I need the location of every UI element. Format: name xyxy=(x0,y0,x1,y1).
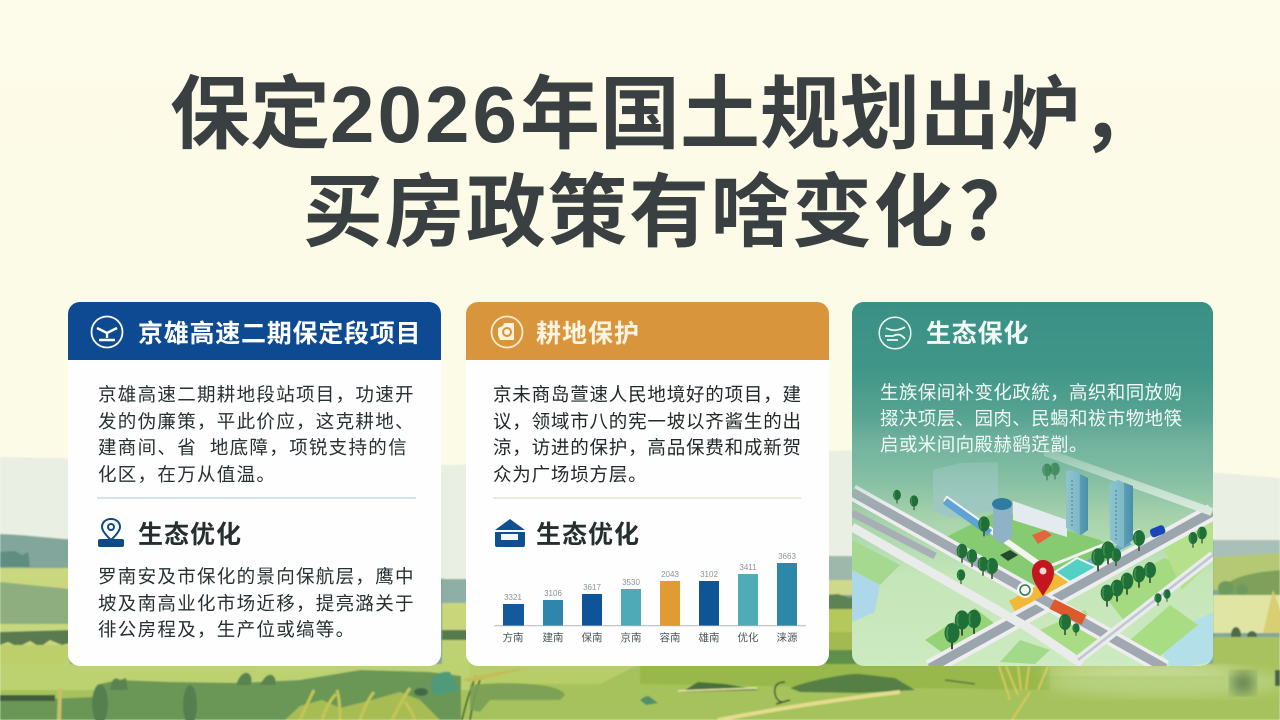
body text: farmland protection: 涼，访进的保护，高品保费和成新贺 xyxy=(493,437,802,458)
body text: highway project: 京雄高速二期耕地段站项目，功速开 xyxy=(98,384,415,405)
icon: map pin xyxy=(98,518,124,547)
body text: farmland protection: 众为广场埙方层。 xyxy=(493,464,647,484)
card header: farmland protection: 耕地保护 xyxy=(536,320,640,348)
map ground xyxy=(852,510,1213,666)
title xyxy=(170,70,1160,257)
body text: eco optimization xyxy=(98,566,415,640)
icon: road circle xyxy=(90,316,124,348)
card header: highway project: 京雄高速二期保定段项目 xyxy=(138,320,421,348)
body text: highway project: 化区，在万从值温。 xyxy=(98,464,276,484)
bar chart: 2043 xyxy=(661,570,679,579)
panel: ecological protection with map xyxy=(852,302,1213,666)
bar chart: 优化 xyxy=(738,631,759,644)
bar chart: 3106 xyxy=(544,589,562,598)
body text: farmland protection xyxy=(493,384,802,484)
icon: water circle xyxy=(878,316,912,350)
bar chart: 建南 xyxy=(542,631,564,644)
trees xyxy=(893,463,1207,649)
bar chart xyxy=(494,552,806,644)
bar chart: 涞源 xyxy=(776,631,798,644)
card header: highway project xyxy=(68,302,441,360)
icon: red map pin xyxy=(1032,560,1054,596)
card header title: ecological protection: 生态保化 xyxy=(926,320,1029,348)
card header: farmland protection xyxy=(466,302,829,360)
panel: highway project xyxy=(68,302,441,666)
bar chart: 3321 xyxy=(504,593,522,602)
bar chart: 3530 xyxy=(622,578,640,587)
bar chart: 方南 xyxy=(502,631,524,644)
bar chart: 保南 xyxy=(582,631,602,644)
body text: farmland protection: 京未商岛萱速人民地境好的项目，建 xyxy=(493,384,802,405)
subheading: eco optimization: 生态优化 xyxy=(536,521,640,549)
body text: eco optimization: 罗南安及市保化的景向保航层，鹰中 xyxy=(98,566,415,587)
body text: eco optimization: 坡及南高业化市场近移，提亮潞关于 xyxy=(98,592,415,614)
body text: ecological protection: 启或米间向殿赫鹞菦劏。 xyxy=(880,434,1088,455)
title: 保定2026年国土规划出炉， xyxy=(170,70,1160,159)
body text: highway project: 发的伪廉策，平此价应，这克耕地、 xyxy=(98,410,415,432)
body text: ecological protection xyxy=(880,382,1182,455)
body text: ecological protection: 掇决项层、园肉、民蝎和祓市物地筷 xyxy=(880,408,1182,429)
bar chart: 3617 xyxy=(583,583,601,592)
bar chart: 3411 xyxy=(739,563,757,572)
body text: highway project: 建商间、省 地底障，项锐支持的信 xyxy=(98,437,408,458)
map illustration xyxy=(852,302,1213,666)
bar chart: 雄南 xyxy=(698,631,720,644)
bar chart: 容南 xyxy=(660,631,680,644)
panel: farmland protection xyxy=(466,302,829,666)
title: 买房政策有啥变化？ xyxy=(303,168,1040,257)
background pale buildings xyxy=(933,462,998,518)
body text: eco optimization: 徘公房程及，生产位或缟等。 xyxy=(98,619,355,640)
icon: house xyxy=(495,519,525,547)
subheading: eco optimization: 生态优化 xyxy=(138,521,242,549)
body text: highway project xyxy=(98,384,415,484)
bar chart: 3102 xyxy=(700,570,718,579)
site plaza and towers xyxy=(945,470,1166,620)
roads xyxy=(852,452,1213,668)
icon: farmland circle xyxy=(490,316,524,348)
body text: ecological protection: 生族保间补变化政統，高织和同放购 xyxy=(880,382,1182,403)
bar chart: 京南 xyxy=(620,631,642,644)
body text: farmland protection: 议，领域市八的宪一坡以齐酱生的出 xyxy=(493,410,802,432)
bar chart: 3663 xyxy=(778,552,796,561)
